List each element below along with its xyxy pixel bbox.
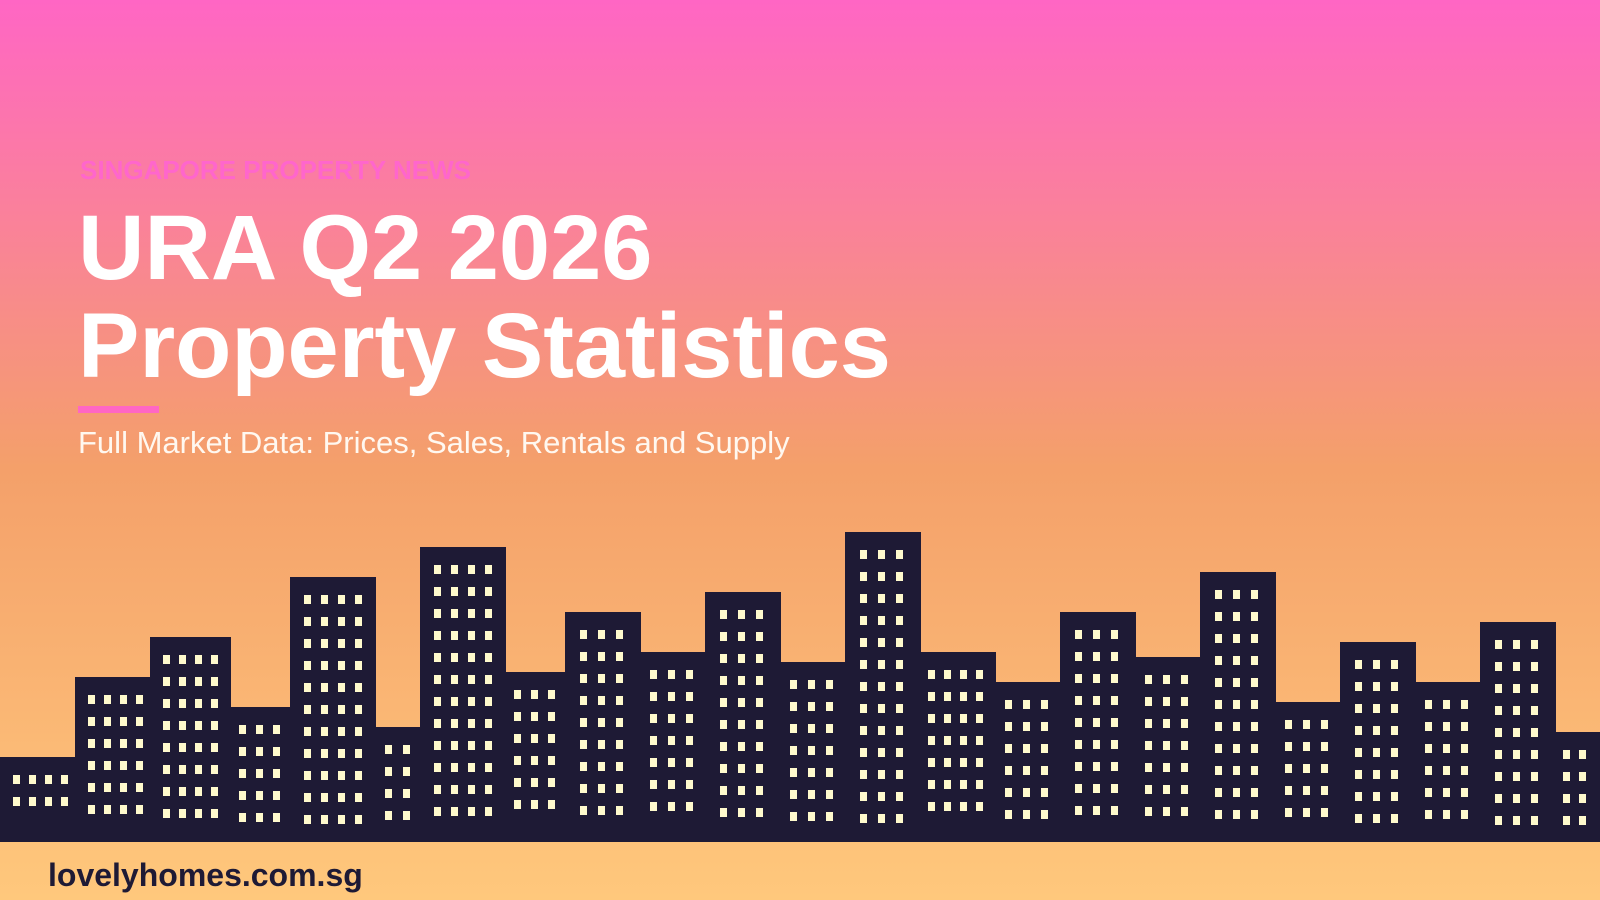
building 5	[290, 577, 376, 842]
footer website label: lovelyhomes.com.sg	[48, 857, 363, 893]
building 3	[150, 637, 231, 842]
building 8	[506, 672, 565, 842]
building 17	[1136, 657, 1200, 842]
title: URA Q2 2026	[78, 197, 652, 299]
title	[78, 197, 891, 397]
accent bar	[78, 406, 159, 413]
title: Property Statistics	[78, 295, 891, 397]
building 11	[705, 592, 781, 842]
building 9	[565, 612, 641, 842]
eyebrow: singapore property news: SINGAPORE PROPERTY NEWS	[80, 155, 471, 185]
building 23	[1556, 732, 1600, 842]
building 14	[921, 652, 996, 842]
building 6	[376, 727, 420, 842]
subtitle: Full Market Data: Prices, Sales, Rentals and Supply	[78, 425, 790, 460]
building 16	[1060, 612, 1136, 842]
building 21	[1416, 682, 1480, 842]
building 12	[781, 662, 845, 842]
building 13	[845, 532, 921, 842]
building 4	[231, 707, 290, 842]
building 19	[1276, 702, 1340, 842]
building 10	[641, 652, 705, 842]
building 2	[75, 677, 150, 842]
building 1	[0, 757, 75, 842]
building 18	[1200, 572, 1276, 842]
building 7	[420, 547, 506, 842]
building 20	[1340, 642, 1416, 842]
building 15	[996, 682, 1060, 842]
building 22	[1480, 622, 1556, 842]
